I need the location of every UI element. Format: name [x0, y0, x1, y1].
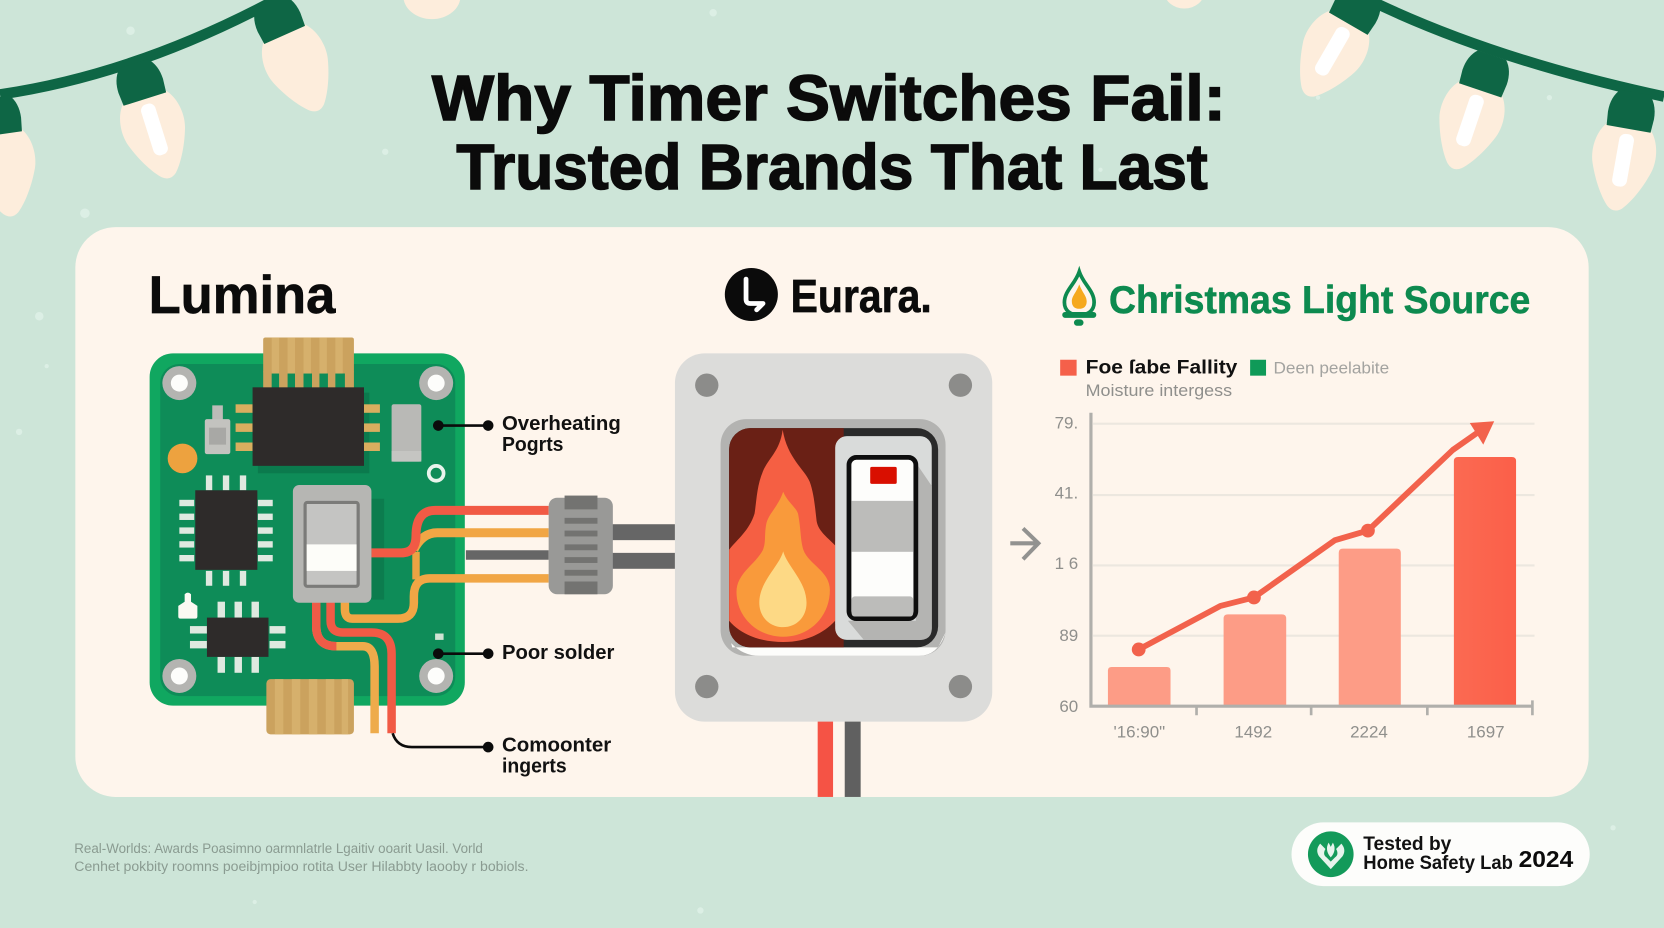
y-axis labels: 41.: [1055, 484, 1078, 503]
top bulb tips: [403, 0, 1204, 19]
main panel: [75, 227, 1589, 797]
burnt switch box: [675, 353, 992, 722]
brand: Eurara: [725, 268, 932, 322]
small chip: [190, 602, 285, 673]
bulb: far left: [0, 93, 43, 221]
y-axis labels: 79.: [1055, 414, 1078, 433]
bottom wires of switch box: [818, 719, 861, 797]
callout: overheating points: [433, 413, 621, 456]
bulb: left outer: [241, 0, 347, 124]
string lights: right: [1279, 0, 1664, 216]
title: [432, 63, 1226, 203]
brand: Lumina: Lumina: [149, 266, 336, 325]
tested badge: 2024: [1519, 846, 1573, 872]
pcb base: [150, 353, 465, 706]
callout: poor solder: [433, 642, 615, 664]
bulb: right outer: [1279, 0, 1394, 111]
x-axis labels: 1492: [1234, 723, 1272, 742]
bulb: right middle: [1424, 45, 1522, 179]
switch shadow: [371, 499, 384, 600]
grey component: [205, 405, 230, 454]
icon: shield leaf: [1308, 831, 1354, 877]
grey capacitor: [392, 404, 421, 462]
top gold connector: [263, 337, 354, 388]
trend line: [1132, 421, 1494, 656]
footnote: Real-Worlds: Awards Poasimno oarmnlatrle Lgaitiv ooarit Uasil. Vorld: [74, 841, 483, 856]
switch plate: [835, 436, 932, 640]
callout: overheating points: Pogrts: [502, 434, 564, 456]
grey wire connector: [549, 496, 675, 594]
callout: component ingerts: Comoonter: [502, 734, 611, 756]
chart legend: [1060, 358, 1389, 400]
footnote: Cenhet pokbity roomns poeibjmpioo rotita User Hilabbty laooby r bobiols.: [74, 859, 528, 874]
wires and traces: [316, 510, 549, 733]
bulb: far right: [1583, 87, 1664, 216]
x-axis labels: '16:90": [1113, 723, 1165, 742]
callout: overheating points: Overheating: [502, 413, 621, 435]
bottom gold connector: [266, 679, 354, 734]
x-axis labels: [1113, 723, 1505, 742]
white component: [178, 593, 197, 619]
chart legend: Foe ſabe Fallity: [1086, 358, 1238, 379]
window bezel: [721, 419, 946, 656]
icon: flame lamp: [1062, 272, 1096, 326]
grid lines: [1093, 424, 1535, 636]
arrow: [1010, 528, 1038, 559]
bar and line chart: [1055, 413, 1535, 742]
mounting holes: [162, 366, 453, 693]
axes: [1091, 413, 1533, 715]
callout: component ingerts: ingerts: [502, 756, 567, 778]
flame: [729, 428, 848, 648]
bulb: left middle: [103, 54, 200, 188]
footnote: [74, 841, 528, 874]
tested badge: Tested by: [1363, 833, 1451, 855]
y-axis labels: 60: [1059, 697, 1078, 716]
screws: [695, 374, 972, 698]
title: Why Timer Switches Fail:: [432, 63, 1226, 134]
small pad: [435, 634, 444, 640]
y-axis labels: [1055, 414, 1078, 716]
brand: Christmas Light Source: Christmas Light Source: [1109, 278, 1530, 322]
circuit board illustration: [150, 337, 549, 734]
callout: poor solder: Poor solder: [502, 642, 615, 664]
chart legend: Moisture intergess: [1086, 381, 1232, 400]
chart legend: Deen peelabite: [1273, 360, 1389, 378]
y-axis labels: 1 6: [1055, 554, 1078, 573]
main chip: [236, 387, 380, 473]
x-axis labels: 2224: [1350, 723, 1388, 742]
tested badge: [1292, 822, 1590, 886]
title: Trusted Brands That Last: [456, 132, 1208, 203]
callout: component ingerts: [393, 733, 611, 778]
tested badge: Home Safety Lab: [1363, 852, 1513, 874]
brand: Eurara: Eurara.: [791, 270, 932, 322]
x-axis labels: 1697: [1467, 723, 1505, 742]
orange capacitor: [168, 444, 197, 473]
bars: [1108, 457, 1516, 706]
y-axis labels: 89: [1059, 626, 1078, 645]
rocker switch: [849, 457, 916, 619]
ring pad: [429, 466, 444, 481]
board switch: [293, 485, 371, 603]
string lights: left: [0, 0, 347, 221]
QFP chip: [179, 475, 273, 586]
